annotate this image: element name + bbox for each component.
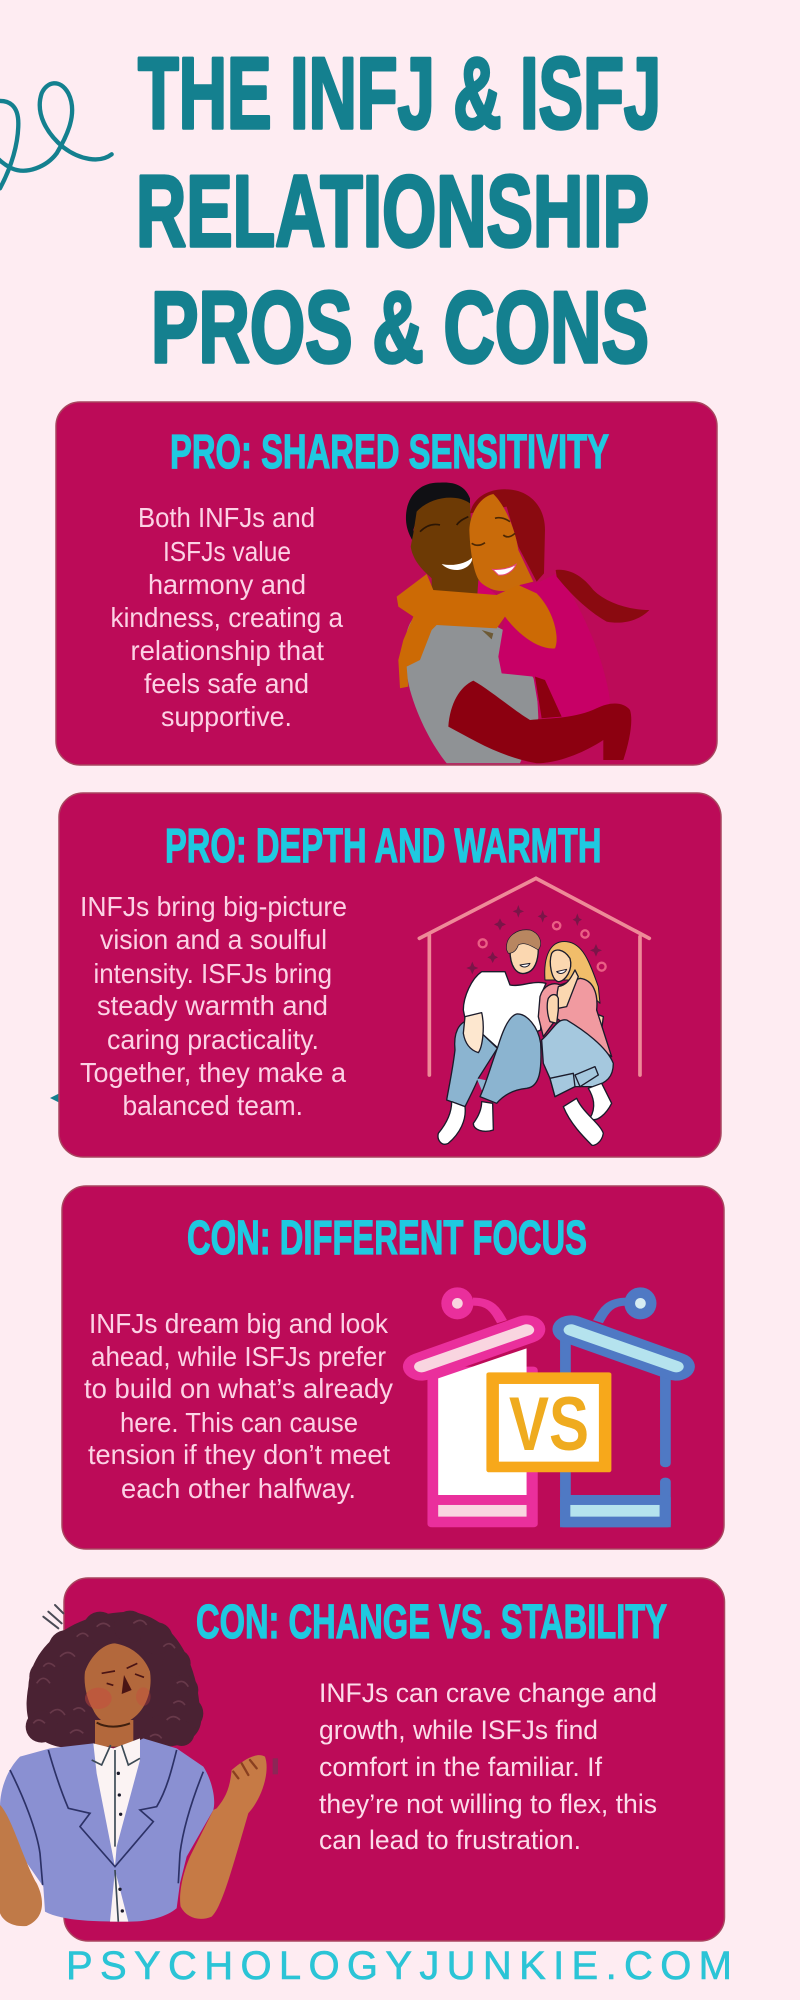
text: shared sensitivity: relationship that xyxy=(130,635,324,666)
footer: website: PSYCHOLOGYJUNKIE.COM xyxy=(66,1944,732,1988)
heading: shared sensitivity: PRO: SHARED SENSITIVITY xyxy=(170,426,609,479)
text: change vs stability: INFJs can crave change and xyxy=(319,1678,657,1708)
panel: change vs stability xyxy=(0,1578,724,1941)
panel: different focus xyxy=(62,1186,724,1549)
text: different focus: INFJs dream big and look xyxy=(89,1308,389,1339)
text: different focus: ahead, while ISFJs prefer xyxy=(91,1341,386,1372)
text: different focus: to build on what’s already xyxy=(84,1373,393,1404)
text: shared sensitivity xyxy=(110,502,343,732)
text: depth and warmth xyxy=(80,891,347,1121)
illustration: frustrated woman xyxy=(0,1605,278,1926)
text: depth and warmth: intensity. ISFJs bring xyxy=(94,958,332,989)
icon text: VS: VS xyxy=(509,1382,589,1467)
text: different focus xyxy=(84,1308,393,1504)
text: depth and warmth: steady warmth and xyxy=(97,990,328,1021)
decorative teal fragment behind panel xyxy=(50,1093,60,1103)
text: change vs stability: can lead to frustration. xyxy=(319,1825,581,1855)
text: different focus: tension if they don’t meet xyxy=(88,1439,390,1470)
icon: debate podiums with VS xyxy=(422,1287,676,1527)
illustration: hugging couple xyxy=(397,483,649,763)
text: depth and warmth: caring practicality. xyxy=(107,1024,319,1055)
text: different focus: here. This can cause xyxy=(120,1407,358,1438)
icon: decorative swirl xyxy=(0,83,112,188)
text: depth and warmth: balanced team. xyxy=(122,1090,303,1121)
text: change vs stability: they’re not willing to flex, this xyxy=(319,1789,657,1819)
text: change vs stability xyxy=(319,1678,657,1855)
illustration: couple in house xyxy=(419,878,649,1145)
text: change vs stability: comfort in the familiar. If xyxy=(319,1752,603,1782)
panel: depth and warmth xyxy=(59,793,721,1157)
text: shared sensitivity: harmony and xyxy=(148,569,306,600)
text: shared sensitivity: kindness, creating a xyxy=(110,602,343,633)
heading: depth and warmth: PRO: DEPTH AND WARMTH xyxy=(165,820,602,873)
text: shared sensitivity: ISFJs value xyxy=(163,536,291,567)
text: shared sensitivity: supportive. xyxy=(161,701,292,732)
heading: different focus: CON: DIFFERENT FOCUS xyxy=(187,1212,587,1265)
text: different focus: each other halfway. xyxy=(121,1473,356,1504)
panel: shared sensitivity xyxy=(56,402,717,765)
text: depth and warmth: Together, they make a xyxy=(80,1057,346,1088)
text: shared sensitivity: feels safe and xyxy=(144,668,309,699)
text: depth and warmth: INFJs bring big-picture xyxy=(80,891,347,922)
title xyxy=(136,38,661,384)
text: change vs stability: growth, while ISFJs find xyxy=(319,1715,598,1745)
text: depth and warmth: vision and a soulful xyxy=(100,924,327,955)
text: shared sensitivity: Both INFJs and xyxy=(138,502,315,533)
